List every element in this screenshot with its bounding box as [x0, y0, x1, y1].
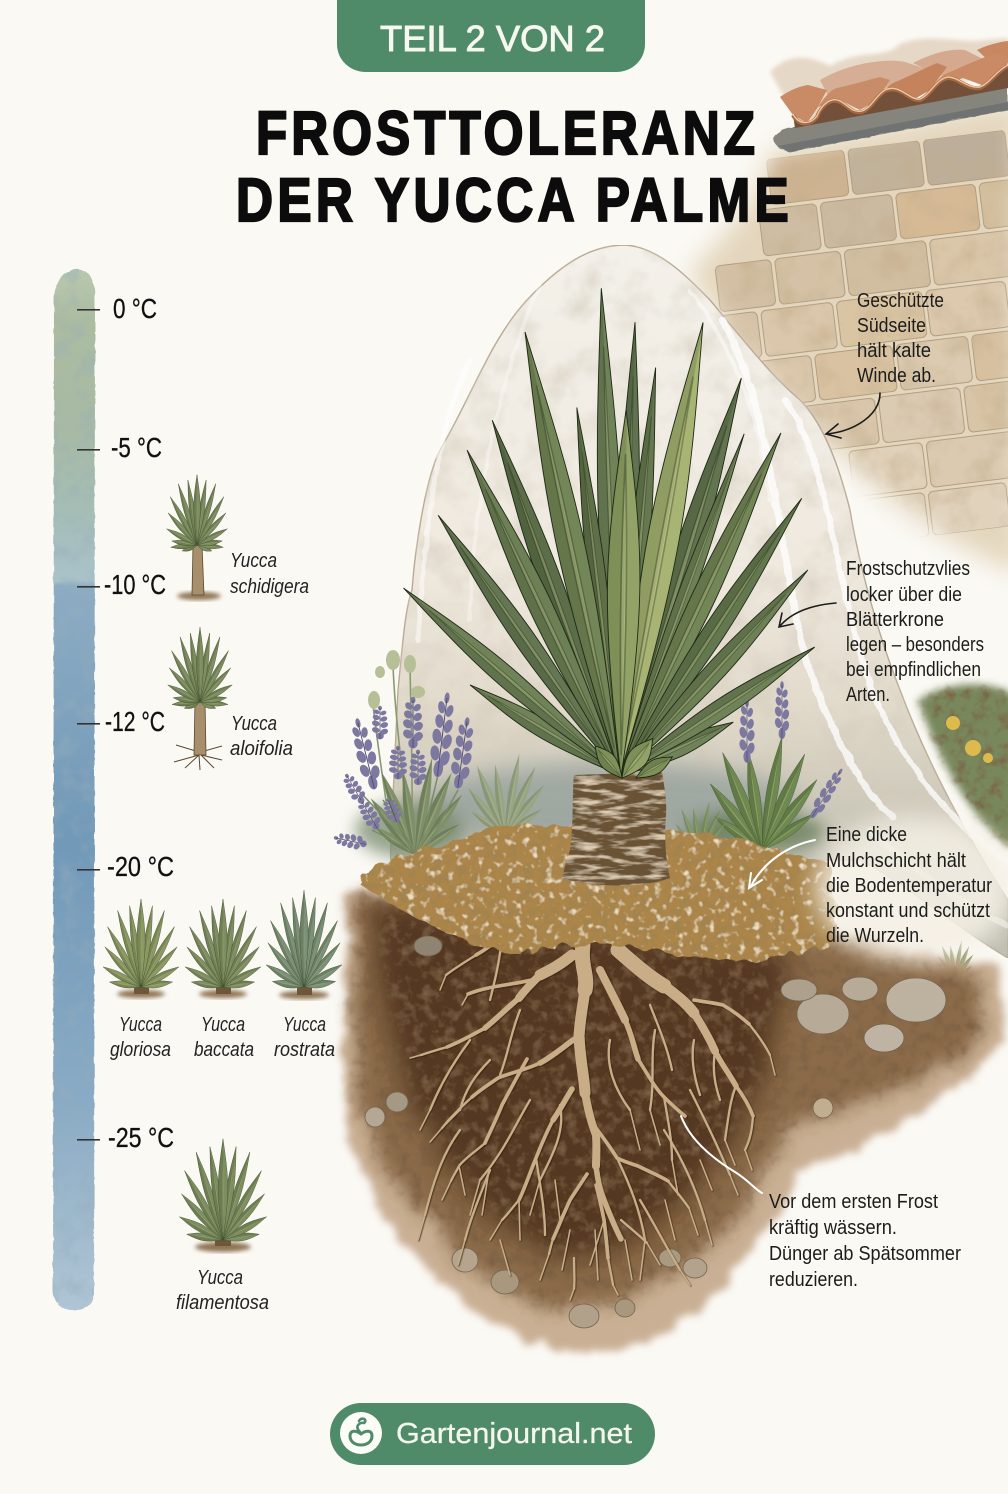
- tick: -10 °C: [77, 569, 166, 600]
- arrow: mulch: [749, 840, 815, 888]
- callout: watering: [769, 1191, 961, 1291]
- tick: -12 °C: -12 °C: [105, 706, 165, 737]
- illustration: mulch layer: [358, 824, 838, 960]
- callout: frost fleece: locker über die: [846, 584, 962, 606]
- yucca: schidigera: schidigera: [230, 576, 309, 598]
- callout: mulch halo and text: Eine dicke: [826, 824, 907, 846]
- callout: watering: Dünger ab Spätsommer: [769, 1243, 961, 1265]
- title: [236, 99, 789, 234]
- slate ledge: [774, 86, 1008, 152]
- callout: frost fleece: Arten.: [846, 684, 890, 706]
- tick: -10 °C: -10 °C: [104, 569, 166, 600]
- illustration: lavender left: [332, 650, 547, 858]
- footer pill: Gartenjournal.net: Gartenjournal.net: [396, 1418, 632, 1450]
- illustration: yucca trunk: [562, 772, 670, 886]
- tick: -20 °C: [77, 851, 174, 882]
- yucca: filamentosa: filamentosa: [176, 1292, 269, 1314]
- tab: part label: [337, 0, 645, 72]
- callout: frost fleece: bei empfindlichen: [846, 659, 981, 681]
- yucca: gloriosa: gloriosa: [110, 1039, 171, 1061]
- callout: mulch halo and text: konstant und schützt: [826, 900, 990, 922]
- title: FROSTTOLERANZ: [256, 99, 755, 167]
- tick: 0 °C: [77, 293, 157, 324]
- illustration: roof: [770, 38, 1008, 152]
- yucca: schidigera: Yucca: [230, 550, 277, 572]
- arrow: frost fleece: [779, 603, 836, 627]
- callout: south side: hält kalte: [857, 340, 931, 362]
- yucca: aloifolia: aloifolia: [230, 738, 293, 760]
- yucca: gloriosa: [102, 899, 180, 1061]
- tab: part label: TEIL 2 VON 2: [380, 18, 605, 59]
- yucca: rostrata: rostrata: [274, 1039, 335, 1061]
- callout: mulch halo and text: [815, 816, 1008, 960]
- callout: mulch halo and text: die Bodentemperatur: [826, 875, 992, 897]
- icon: logo: [340, 1412, 382, 1454]
- yucca: schidigera: [165, 475, 309, 600]
- yucca: filamentosa: [176, 1139, 269, 1314]
- tick: -12 °C: [77, 706, 165, 737]
- illustration: roots: [410, 936, 775, 1300]
- stones: [365, 936, 946, 1328]
- shadow behind plant: [420, 763, 800, 847]
- yucca: aloifolia: [166, 627, 293, 770]
- fleece folds: [418, 285, 1007, 925]
- callout: south side: Geschützte: [857, 290, 944, 312]
- callout: south side: [857, 290, 944, 387]
- callout: mulch halo and text: Mulchschicht hält: [826, 850, 966, 872]
- callout: frost fleece: legen – besonders: [846, 634, 984, 656]
- thermometer bar: [53, 269, 95, 1310]
- yucca: aloifolia: Yucca: [231, 713, 277, 735]
- callout: mulch halo and text: die Wurzeln.: [826, 925, 924, 947]
- callout: watering: kräftig wässern.: [769, 1217, 897, 1239]
- callout: frost fleece: Blätterkrone: [846, 609, 944, 631]
- yucca: baccata: [184, 899, 262, 1061]
- callout: frost fleece: Frostschutzvlies: [846, 558, 970, 580]
- tick: -25 °C: -25 °C: [108, 1122, 174, 1153]
- arrow: roots: [681, 1116, 762, 1193]
- yucca: filamentosa: Yucca: [197, 1267, 243, 1289]
- yucca: rostrata: Yucca: [283, 1014, 326, 1036]
- footer pill: Gartenjournal.net: [330, 1403, 655, 1465]
- illustration: main yucca crown: [397, 288, 820, 784]
- tick: -5 °C: -5 °C: [111, 432, 162, 463]
- illustration: stone wall: [683, 92, 1008, 580]
- callout: watering: reduzieren.: [769, 1269, 858, 1291]
- yucca: rostrata: [265, 890, 343, 1061]
- yucca: baccata: baccata: [194, 1039, 254, 1061]
- dark core: [368, 905, 790, 1256]
- tick: -25 °C: [77, 1122, 174, 1153]
- callout: south side: Winde ab.: [857, 365, 936, 387]
- pale outer wash: [343, 890, 1004, 1352]
- yucca: gloriosa: Yucca: [119, 1014, 162, 1036]
- arrow: south side: [826, 393, 880, 438]
- title: DER YUCCA PALME: [236, 166, 789, 234]
- illustration: small grass clump: [936, 940, 975, 979]
- illustration: lavender right: [673, 681, 848, 857]
- yucca: baccata: Yucca: [201, 1014, 245, 1036]
- base bud leaves: [589, 741, 628, 783]
- tick: -5 °C: [77, 432, 162, 463]
- tick: -20 °C: -20 °C: [107, 851, 174, 882]
- tick: 0 °C: 0 °C: [113, 293, 157, 324]
- callout: frost fleece: [846, 558, 984, 706]
- illustration: frost fleece: [390, 245, 1008, 958]
- tiles: [820, 61, 930, 100]
- callout: watering: Vor dem ersten Frost: [769, 1191, 938, 1213]
- mid brown: [352, 895, 990, 1307]
- illustration: soil cross section: [343, 890, 1004, 1352]
- callout: south side: Südseite: [857, 315, 926, 337]
- illustration: background shrub with yellow flowers: [918, 684, 1008, 850]
